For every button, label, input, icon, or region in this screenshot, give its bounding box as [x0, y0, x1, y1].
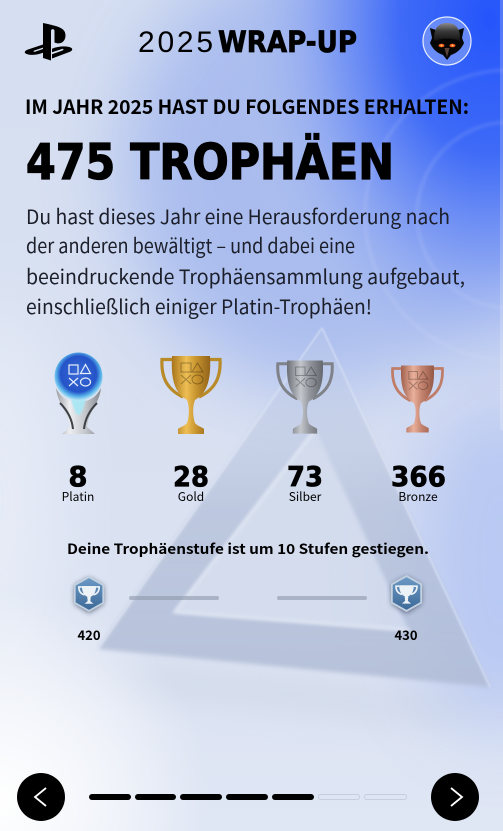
trophy: bronze: [391, 365, 446, 505]
trophy level progress: [75, 576, 421, 644]
next button: [431, 773, 479, 821]
gold label: Gold: [178, 488, 204, 505]
header title: [138, 25, 357, 59]
silver label: Silber: [289, 488, 322, 505]
progress dash left: [129, 596, 219, 600]
platinum label: Platin: [62, 488, 94, 505]
header title: WRAP-UP: [218, 25, 357, 59]
icon: PlayStation logo: [25, 23, 72, 60]
large blurred triangle: [98, 328, 490, 725]
avatar: [423, 17, 471, 65]
body text: einschließlich einiger Platin-Trophäen!: [26, 291, 372, 320]
level 430: 430: [394, 625, 418, 644]
bronze label: Bronze: [398, 488, 438, 505]
icon: gold trophy: [162, 356, 220, 434]
body text: Du hast dieses Jahr eine Herausforderung nach: [26, 201, 450, 230]
silver count: 73: [287, 461, 323, 493]
icon: level 430 badge: [392, 576, 421, 613]
headline: trophy total: 475 TROPHÄEN: [26, 133, 394, 191]
icon: bronze trophy: [392, 365, 443, 433]
trophy: silver: [278, 360, 332, 505]
bronze count: 366: [391, 461, 446, 493]
platinum count: 8: [68, 461, 88, 493]
icon: silver trophy: [278, 360, 332, 434]
body text: [26, 201, 465, 320]
header title: 2025: [138, 26, 213, 59]
subheading: IM JAHR 2025 HAST DU FOLGENDES ERHALTEN:: [25, 91, 469, 120]
decorative arcs: [365, 70, 503, 360]
body text: der anderen bewältigt – und dabei eine: [26, 230, 355, 259]
trophy: gold: [162, 356, 220, 505]
icon: platinum trophy: [54, 352, 102, 434]
level 420: 420: [77, 625, 101, 644]
previous button: [17, 773, 65, 821]
body text: beeindruckende Trophäensammlung aufgebaut,: [26, 261, 465, 290]
trophy level statement: Deine Trophäenstufe ist um 10 Stufen gestiegen.: [67, 539, 429, 559]
progress dash right: [277, 596, 367, 600]
trophy: platinum: [54, 352, 102, 505]
story progress bar: [89, 794, 406, 800]
gold count: 28: [173, 461, 209, 493]
icon: level 420 badge: [75, 577, 103, 613]
